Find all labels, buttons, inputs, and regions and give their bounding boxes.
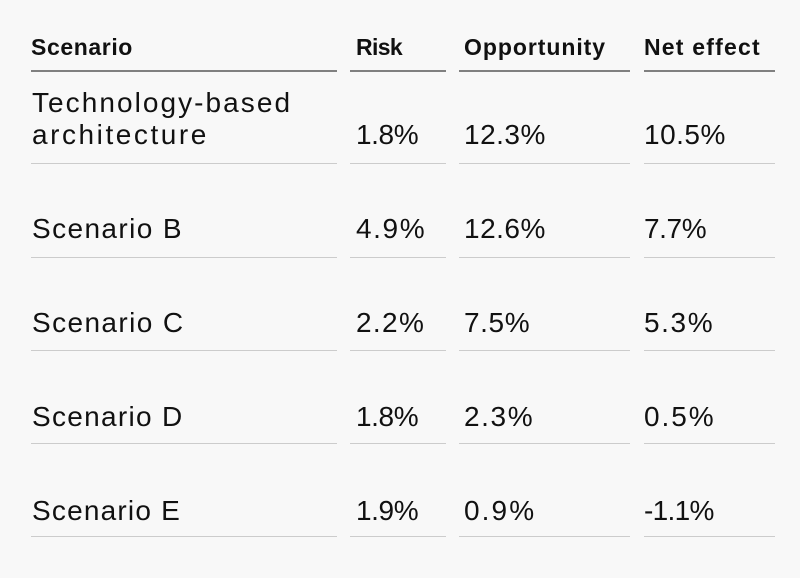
row: Scenario E: Scenario E	[32, 495, 181, 526]
row: Scenario C: 5.3%	[644, 307, 714, 338]
row: Scenario E: 1.9%	[356, 495, 418, 526]
row: Scenario C: Scenario C	[32, 307, 185, 338]
header row: Opportunity	[464, 34, 606, 60]
row: Scenario D: 0.5%	[644, 401, 716, 432]
header row: Net effect	[644, 34, 761, 60]
row: Technology-based architecture: architecture	[32, 119, 209, 150]
row: Scenario B: 12.6%	[464, 213, 546, 244]
row: Technology-based architecture	[31, 87, 775, 164]
row: Scenario E: 0.9%	[464, 495, 536, 526]
row: Technology-based architecture: Technology-based	[32, 87, 292, 118]
row: Scenario E	[31, 495, 775, 537]
row: Scenario C: 7.5%	[464, 307, 530, 338]
row: Technology-based architecture: 12.3%	[464, 119, 546, 150]
row: Scenario B: 4.9%	[356, 213, 426, 244]
row: Scenario B: Scenario B	[32, 213, 183, 244]
row: Scenario B: 7.7%	[644, 213, 706, 244]
header row: Scenario	[31, 34, 133, 60]
row: Scenario B	[31, 213, 775, 258]
row: Scenario C: 2.2%	[356, 307, 425, 338]
row: Scenario E: -1.1%	[644, 495, 714, 526]
row: Scenario C	[31, 307, 775, 351]
row: Scenario D: Scenario D	[32, 401, 184, 432]
row: Technology-based architecture: 1.8%	[356, 119, 418, 150]
row: Scenario D: 2.3%	[464, 401, 534, 432]
row: Technology-based architecture: 10.5%	[644, 119, 726, 150]
row: Scenario D: 1.8%	[356, 401, 418, 432]
header row	[31, 34, 775, 72]
header row: Risk	[356, 34, 402, 60]
row: Scenario D	[31, 401, 775, 444]
